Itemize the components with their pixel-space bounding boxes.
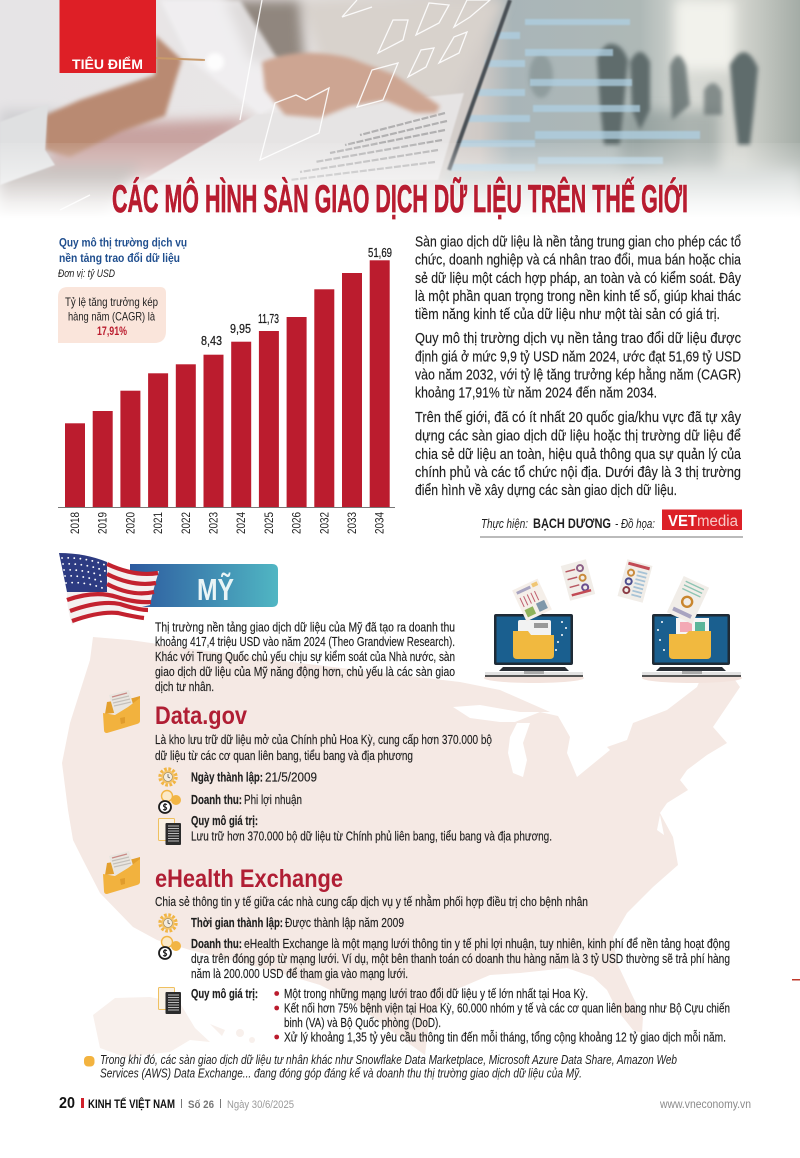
callout: CAGR: Tỷ lệ tăng trưởng kép	[65, 295, 158, 309]
USA intro text: khoảng 417,4 triệu USD vào năm 2024 (Theo Grandview Research).	[155, 635, 455, 649]
blue glass stripes	[450, 19, 700, 171]
footer: KINH TẾ VIỆT NAM	[88, 1098, 175, 1111]
icon: value scale	[158, 988, 181, 1014]
footer: Ngày 30/6/2025	[227, 1099, 294, 1111]
description	[155, 733, 492, 763]
bar chart: market size 2018-2034: 2022	[179, 512, 193, 534]
intro article text: chính phủ và các tổ chức nội địa. Dưới đây là 3 thị trường	[415, 465, 741, 481]
banner: MỸ	[130, 564, 278, 607]
bar chart: market size 2018-2034	[58, 246, 395, 534]
intro article text: là một phần quan trọng trong nền kinh tế số, giúp khai thác	[415, 289, 741, 305]
icon: folder	[103, 690, 140, 733]
intro article text: sẻ dữ liệu một cách hợp pháp, an toàn và có kiểm soát. Đây	[415, 271, 742, 287]
value scale: Quy mô giá trị:	[191, 814, 258, 828]
founding time: Thời gian thành lập:	[191, 916, 283, 930]
icon: folder	[103, 851, 140, 894]
icon: founding time	[160, 915, 176, 931]
bar chart: market size 2018-2034: 2032	[317, 512, 331, 534]
USA intro text: dịch tư nhân.	[155, 680, 214, 694]
founding time: Được thành lập năm 2009	[285, 916, 404, 930]
value scale: binh (VA) và Bộ Quốc phòng (DoD).	[284, 1016, 441, 1030]
bar chart: market size 2018-2034: 2025	[262, 512, 276, 534]
credits line	[480, 510, 743, 538]
USA intro text: Thị trường nền tảng giao dịch dữ liệu của Mỹ đã tạo ra doanh thu	[155, 620, 455, 634]
note: private data exchanges: Services (AWS) Data Exchange... đang đóng góp đáng kể và doanh thu thị trường giao dịch dữ liệu của Mỹ.	[100, 1066, 582, 1080]
revenue	[191, 793, 302, 807]
intro article text	[415, 234, 742, 499]
revenue: Phi lợi nhuận	[244, 793, 302, 807]
flag of the USA	[59, 553, 159, 625]
revenue	[191, 937, 730, 981]
intro article text: chức, doanh nghiệp và cá nhân trao đổi, mua bán hoặc chia	[415, 252, 742, 268]
chart heading: Quy mô thị trường dịch vụ	[59, 236, 187, 250]
chart heading: Đơn vị: tỷ USD	[58, 268, 115, 280]
bar chart: market size 2018-2034: 11,73	[258, 312, 279, 326]
footer	[59, 1095, 751, 1112]
intro article text: tiềm năng kinh tế của dữ liệu như một tài sản có giá trị.	[415, 307, 720, 323]
founding date: Ngày thành lập:	[191, 770, 263, 784]
credits line: VET	[668, 513, 698, 530]
bar chart: market size 2018-2034: 2020	[123, 512, 137, 534]
icon: founding date	[160, 769, 176, 785]
section tab: TIÊU ĐIỂM	[60, 0, 156, 73]
intro article text: dựng các sàn giao dịch dữ liệu hoặc thị trường dữ liệu để	[415, 428, 741, 444]
intro article text: Quy mô thị trường dịch vụ nền tảng trao đổi dữ liệu được	[415, 331, 741, 347]
value scale	[191, 987, 730, 1044]
laptop body and keyboard	[143, 93, 464, 180]
bar chart: market size 2018-2034: 2026	[290, 512, 304, 534]
revenue: năm là 200.000 USD để tham gia vào mạng lưới.	[191, 967, 408, 981]
heading: Data.gov: Data.gov	[155, 702, 247, 730]
bar chart: market size 2018-2034: 2034	[373, 512, 387, 534]
bar chart: market size 2018-2034: 8,43	[201, 334, 222, 348]
footer: www.vneconomy.vn	[659, 1099, 751, 1111]
section tab: TIÊU ĐIỂM: TIÊU ĐIỂM	[72, 55, 143, 72]
hero photo: hands typing on a laptop	[0, 0, 800, 227]
founding time	[191, 916, 404, 930]
footer: 20	[59, 1095, 75, 1112]
illustration: two laptops exchanging documents	[484, 559, 742, 683]
left hand with pen	[45, 35, 182, 157]
USA intro text: Khác với Trung Quốc chủ yếu chịu sự kiểm soát của Nhà nước, sàn	[155, 650, 455, 664]
USA intro text: giao dịch dữ liệu của Mỹ năng động hơn, chủ yếu là các sàn giao	[155, 665, 455, 679]
intro article text: chia sẻ dữ liệu an toàn, hiệu quả thông qua sự quản lý của	[415, 447, 742, 463]
line-art folders	[60, 0, 490, 210]
intro article text: khoảng 17,91% từ năm 2024 đến năm 2034.	[415, 386, 657, 402]
callout: CAGR: 17,91%	[97, 324, 127, 338]
banner: MỸ: MỸ	[197, 572, 234, 607]
callout: CAGR	[58, 287, 166, 343]
background map of the USA	[62, 637, 740, 1057]
USA intro text	[155, 620, 455, 694]
bar chart: market size 2018-2034: 2019	[96, 512, 110, 534]
heading: eHealth Exchange: eHealth Exchange	[155, 865, 343, 893]
bar chart: market size 2018-2034: 2023	[206, 512, 220, 534]
callout: CAGR: hàng năm (CAGR) là	[68, 310, 155, 324]
footer: Số 26	[188, 1099, 214, 1111]
intro article text: Sàn giao dịch dữ liệu là nền tảng trung gian cho phép các tổ	[415, 234, 741, 250]
icon: revenue	[159, 936, 181, 959]
revenue: Doanh thu:	[191, 937, 242, 951]
intro article text: điển hình về xây dựng các sàn giao dịch dữ liệu.	[415, 483, 677, 499]
value scale: Lưu trữ hơn 370.000 bộ dữ liệu từ Chính phủ liên bang, tiểu bang và địa phương.	[191, 830, 552, 844]
icon: revenue	[159, 790, 181, 813]
chart heading	[58, 236, 187, 280]
credits line: - Đồ họa:	[615, 517, 655, 531]
bar chart: market size 2018-2034: 2018	[68, 512, 82, 534]
credits line: media	[697, 513, 738, 530]
value scale: Quy mô giá trị:	[191, 987, 258, 1001]
right hand on keyboard	[262, 53, 440, 118]
value scale	[191, 814, 552, 844]
bar chart: market size 2018-2034: 9,95	[230, 322, 251, 336]
panel: Data.gov	[103, 690, 552, 845]
intro article text: định giá ở mức 9,9 tỷ USD năm 2024, ước đạt 51,69 tỷ USD	[415, 350, 741, 366]
bar chart: market size 2018-2034: 2033	[345, 512, 359, 534]
chart heading: nền tảng trao đổi dữ liệu	[59, 251, 180, 265]
description: Chia sẻ thông tin y tế giữa các nhà cung cấp dịch vụ y tế nhằm phối hợp điều trị cho bệnh nhân	[155, 894, 588, 909]
note: private data exchanges	[84, 1053, 677, 1080]
founding date: 21/5/2009	[265, 770, 317, 784]
intro article text: Trên thế giới, đã có ít nhất 20 quốc gia/khu vực đã tự xây	[415, 410, 742, 426]
bar chart: market size 2018-2034: 51,69	[368, 246, 392, 260]
icon: value scale	[158, 818, 181, 845]
value scale: Một trong những mạng lưới trao đổi dữ liệu y tế lớn nhất tại Hoa Kỳ.	[284, 987, 588, 1001]
bar chart: market size 2018-2034: 2024	[234, 512, 248, 534]
intro article text: vào năm 2032, với tỷ lệ tăng trưởng kép hằng năm (CAGR)	[415, 366, 741, 384]
description: dữ liệu từ các cơ quan liên bang, tiểu bang và địa phương	[155, 749, 413, 763]
credits line: BẠCH DƯƠNG	[533, 515, 611, 531]
silhouettes of people	[529, 44, 758, 145]
credits line: Thực hiện:	[481, 517, 528, 531]
description: Là kho lưu trữ dữ liệu mở của Chính phủ Hoa Kỳ, cung cấp hơn 370.000 bộ	[155, 733, 492, 747]
bar chart: market size 2018-2034: 2021	[151, 512, 165, 534]
panel: eHealth Exchange	[103, 851, 730, 1044]
revenue: Doanh thu:	[191, 793, 242, 807]
